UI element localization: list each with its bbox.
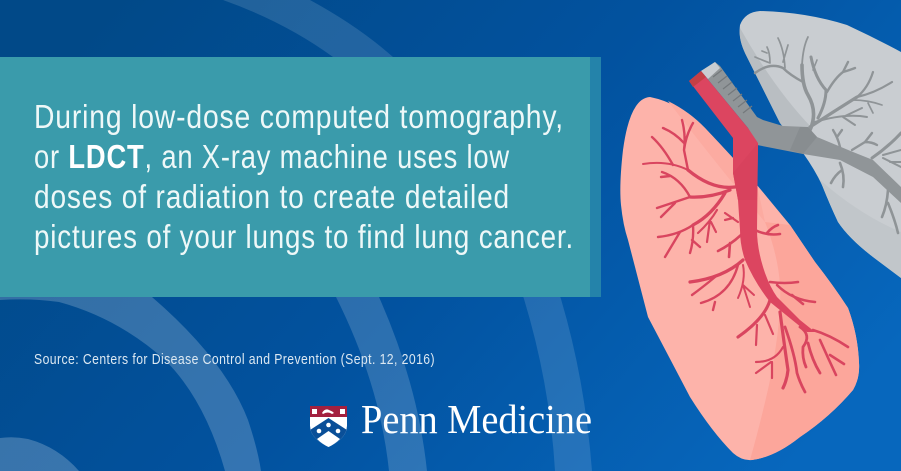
main statement text: During low-dose computed tomography, [34,99,564,136]
pink lung branches [643,120,848,392]
main statement text: or LDCT, an X-ray machine uses low [34,139,510,176]
logo wordmark: Penn Medicine [361,396,592,442]
main statement text [34,99,574,256]
Penn Medicine logo [310,396,592,447]
icon: Penn shield [310,406,347,447]
background signal arcs [0,0,592,471]
main statement text: doses of radiation to create detailed [34,179,510,216]
gray lung [740,11,901,278]
trachea cartilage ribs [713,70,752,113]
source note: Source: Centers for Disease Control and Prevention (Sept. 12, 2016) [34,352,435,368]
main statement text: pictures of your lungs to find lung cancer. [34,219,574,256]
panel: teal text box [0,57,601,297]
illustration: lungs [620,11,901,460]
pink lung [620,62,901,460]
gray lung branches [755,37,901,233]
trachea and main bronchi [689,62,901,332]
